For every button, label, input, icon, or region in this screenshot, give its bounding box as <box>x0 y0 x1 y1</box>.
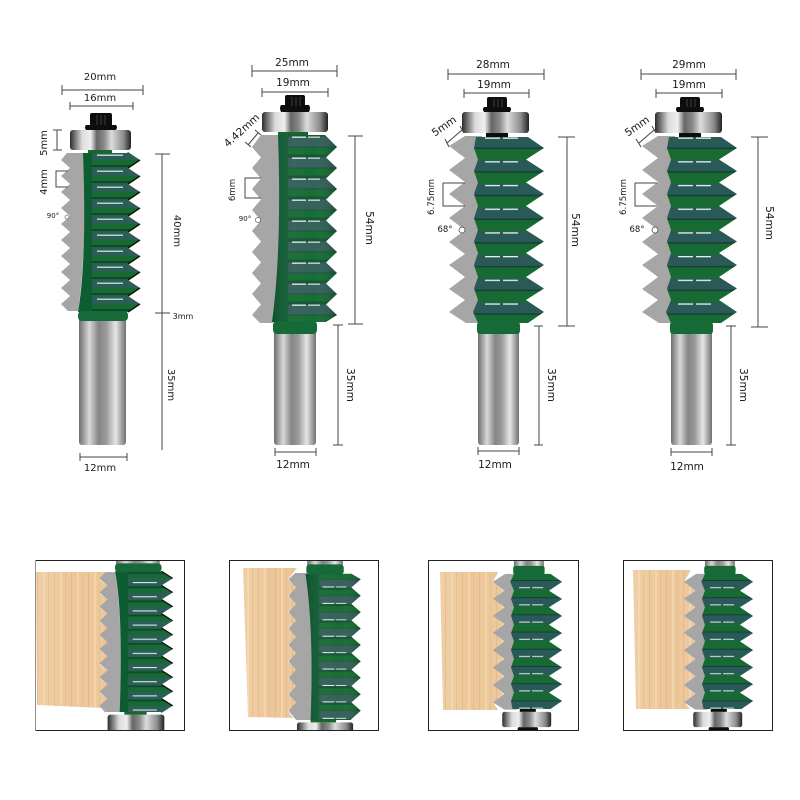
dimension: 35mm <box>726 326 749 445</box>
panel: bit 3 cutting wood <box>428 560 579 731</box>
angle 68 degrees <box>629 225 658 235</box>
dimension: 12mm: 12mm <box>84 463 116 474</box>
dimension: 5mm: 5mm <box>39 130 50 156</box>
wood piece <box>440 572 504 710</box>
dimension: 20mm <box>62 72 143 95</box>
dimension: 5mm: 5mm <box>623 114 652 139</box>
dimension: 25mm <box>252 57 337 77</box>
bit 4 body <box>642 97 737 445</box>
dimension: 54mm <box>348 136 375 324</box>
dimension: 35mm <box>333 325 356 445</box>
dimension: 6.75mm: 6.75mm <box>619 179 629 215</box>
dimension: 35mm: 35mm <box>344 368 356 402</box>
dimension: 19mm <box>464 79 529 98</box>
dimension: 5mm <box>430 114 464 147</box>
panel: bit 4 cutting wood <box>623 560 773 731</box>
dimension: 12mm <box>478 447 519 471</box>
inverted bit <box>684 561 753 730</box>
router bit 3 with dimensions <box>427 59 581 471</box>
dimension: 12mm: 12mm <box>478 459 512 471</box>
dimension: 29mm: 29mm <box>672 59 706 71</box>
router bit 2 with dimensions <box>222 57 375 471</box>
dimension: 6mm: 6mm <box>228 179 238 201</box>
dimension: 19mm: 19mm <box>672 79 706 91</box>
dimension: 4mm: 4mm <box>39 169 50 195</box>
dimension: 54mm <box>558 137 581 326</box>
dimension: 25mm: 25mm <box>275 57 309 69</box>
dimension: 40mm: 40mm <box>171 215 182 247</box>
angle 90 degrees <box>239 215 261 223</box>
dimension: 12mm <box>670 448 712 473</box>
dimension: 40mm <box>155 154 182 450</box>
dimension: 6.75mm <box>427 179 465 215</box>
dimension: 12mm <box>275 448 316 471</box>
dimension: 3mm: 3mm <box>173 312 194 321</box>
dimension: 16mm <box>70 93 133 110</box>
router bit 1 with dimensions <box>39 72 194 474</box>
dimension: 19mm <box>262 77 328 97</box>
dimension: 54mm: 54mm <box>569 213 581 247</box>
dimension: 5mm: 5mm <box>430 114 459 139</box>
dimension: 35mm: 35mm <box>737 368 749 402</box>
dimension: 5mm <box>39 130 62 156</box>
dimension: 19mm: 19mm <box>477 79 511 91</box>
inverted bit <box>492 561 562 730</box>
dimension: 35mm: 35mm <box>545 368 557 402</box>
dimension: 54mm: 54mm <box>363 211 375 245</box>
dimension: 54mm: 54mm <box>763 206 775 240</box>
dimension: 28mm <box>448 59 544 80</box>
dimension: 5mm <box>623 114 656 147</box>
angle 68 degrees <box>437 225 465 235</box>
inverted bit <box>99 561 173 730</box>
dimension: 6.75mm <box>619 179 657 215</box>
angle 90 degrees: 90° <box>47 212 59 220</box>
bit 3 body <box>449 97 544 445</box>
dimension: 16mm: 16mm <box>84 93 116 104</box>
dimension: 29mm <box>641 59 736 80</box>
dimension: 4mm <box>39 169 68 195</box>
dimension: 19mm <box>656 79 722 98</box>
dimension: 19mm: 19mm <box>276 77 310 89</box>
dimension: 20mm: 20mm <box>84 72 116 83</box>
dimension: 35mm <box>534 326 557 445</box>
angle 68 degrees: 68° <box>437 225 453 235</box>
dimension: 28mm: 28mm <box>476 59 510 71</box>
dimension: 6mm <box>228 178 261 201</box>
dimension: 35mm: 35mm <box>165 369 176 401</box>
bit 1 body <box>61 113 140 445</box>
panel: bit 2 cutting wood <box>229 560 379 731</box>
angle 90 degrees <box>47 212 69 220</box>
dimension: 54mm <box>751 137 775 327</box>
router bit 4 with dimensions <box>619 59 775 473</box>
dimension: 4.42mm: 4.42mm <box>222 112 262 150</box>
inverted bit <box>288 561 361 730</box>
dimension: 12mm: 12mm <box>276 459 310 471</box>
wood piece <box>243 568 297 718</box>
panel: bit 1 cutting wood <box>36 560 185 731</box>
angle 68 degrees: 68° <box>629 225 645 235</box>
dimension: 12mm: 12mm <box>670 461 704 473</box>
dimension: 12mm <box>80 453 127 474</box>
wood piece <box>633 570 695 709</box>
dimension: 6.75mm: 6.75mm <box>427 179 437 215</box>
wood piece <box>36 572 112 708</box>
angle 90 degrees: 90° <box>239 215 251 223</box>
bit 2 body <box>252 95 337 445</box>
